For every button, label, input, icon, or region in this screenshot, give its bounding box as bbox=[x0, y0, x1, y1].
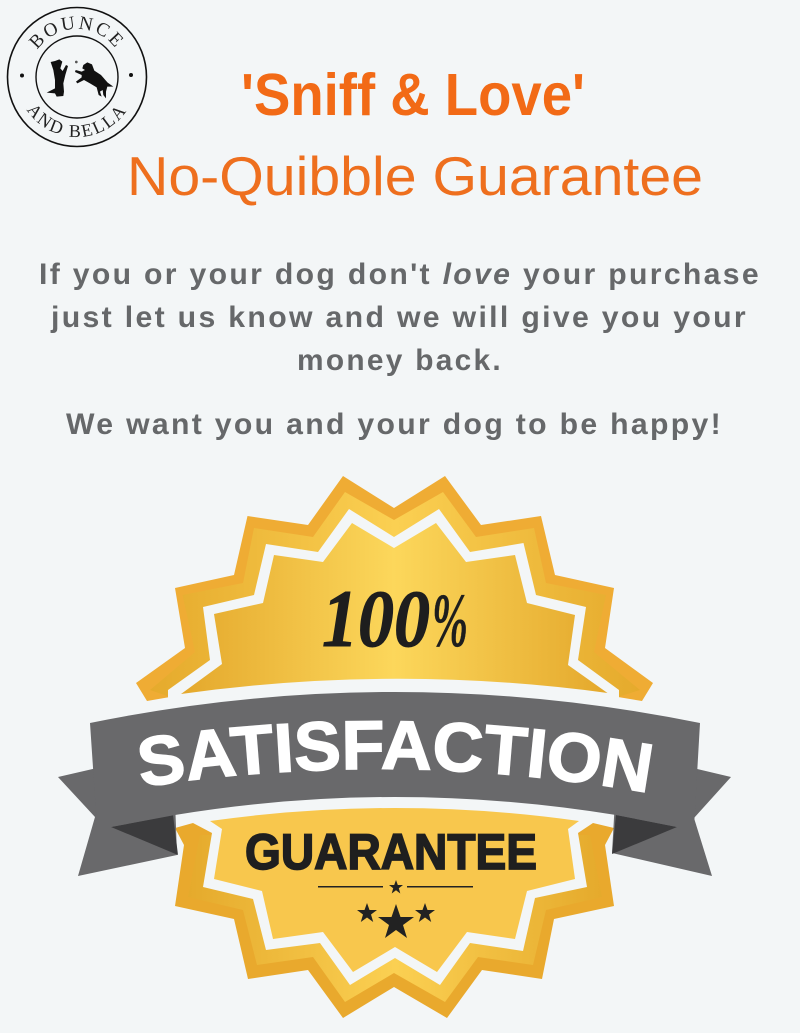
heading: No-Quibble Guarantee: No-Quibble Guarantee bbox=[127, 145, 703, 207]
ribbon folds bbox=[111, 815, 178, 855]
ribbon main band bbox=[90, 692, 700, 827]
text: SATISFACTION: SATISFACTION bbox=[140, 720, 652, 793]
body text: just let us know and we will give you your bbox=[50, 301, 748, 334]
body text: money back. bbox=[297, 344, 503, 377]
divider with star bbox=[318, 880, 473, 894]
body text bbox=[39, 258, 761, 441]
text: 100%: % bbox=[432, 579, 468, 663]
text: 100%: 100 bbox=[322, 573, 430, 664]
ribbon tails bbox=[58, 768, 177, 876]
body text: We want you and your dog to be happy! bbox=[66, 408, 723, 441]
ribbon banner bbox=[58, 692, 731, 876]
heading: Sniff and Love: 'Sniff & Love' bbox=[241, 62, 585, 128]
logo: Bounce and Bella: AND BELLA bbox=[26, 106, 126, 138]
badge: top half bbox=[136, 476, 653, 701]
text: GUARANTEE: GUARANTEE bbox=[245, 824, 537, 880]
body text: If you or your dog don't love your purchase bbox=[39, 258, 761, 291]
icon: three stars bbox=[357, 903, 435, 938]
badge: bottom half bbox=[175, 800, 614, 1018]
logo: Bounce and Bella: BOUNCE bbox=[28, 16, 124, 50]
logo: Bounce and Bella bbox=[6, 6, 148, 148]
